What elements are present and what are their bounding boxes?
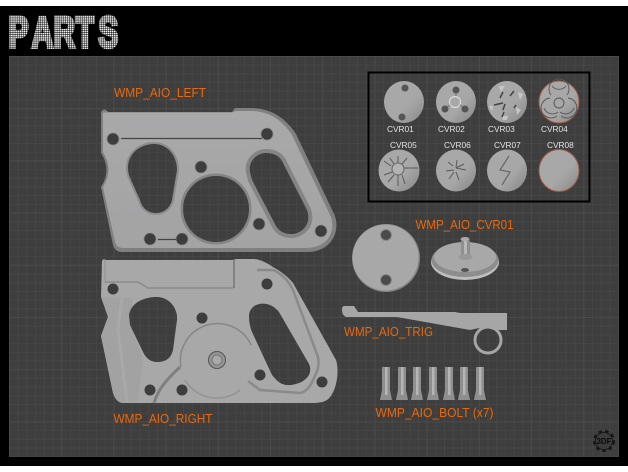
holes bbox=[107, 128, 327, 245]
part: bolts bbox=[380, 367, 486, 400]
label: cover: WMP_AIO_CVR01 bbox=[416, 218, 514, 232]
icon: CVR03 bbox=[487, 81, 527, 123]
callout: cover variants bbox=[368, 72, 590, 202]
title: PARTS bbox=[8, 7, 118, 56]
label: trigger: WMP_AIO_TRIG bbox=[344, 325, 433, 339]
cover labels: CVR01 bbox=[387, 124, 414, 134]
label: right: WMP_AIO_RIGHT bbox=[114, 412, 213, 426]
cover labels bbox=[387, 124, 574, 150]
part: cover side bbox=[431, 237, 499, 280]
icon: CVR02 bbox=[436, 81, 476, 123]
cover labels: CVR05 bbox=[390, 140, 417, 150]
cover labels: CVR06 bbox=[444, 140, 471, 150]
part: trigger bbox=[342, 306, 507, 353]
label: left: WMP_AIO_LEFT bbox=[114, 86, 206, 100]
cover labels: CVR07 bbox=[494, 140, 521, 150]
cover labels: CVR04 bbox=[541, 124, 568, 134]
gear housing bbox=[180, 324, 251, 367]
label: bolts: WMP_AIO_BOLT (x7) bbox=[376, 406, 494, 420]
cover labels: CVR03 bbox=[488, 124, 515, 134]
icon: CVR05 bbox=[378, 150, 420, 192]
icon: CVR07 bbox=[487, 150, 527, 192]
icon: CVR01 bbox=[384, 81, 424, 123]
part: left plate bbox=[101, 108, 336, 252]
grip bbox=[101, 297, 143, 403]
logo: 3DF gear bbox=[594, 432, 614, 450]
icon: CVR08 bbox=[539, 150, 579, 192]
holes bbox=[108, 278, 328, 396]
icon: CVR04 bbox=[539, 79, 579, 123]
part: right plate bbox=[101, 259, 338, 403]
cover labels: CVR02 bbox=[438, 124, 465, 134]
logo: 3DF gear: 3DF bbox=[596, 437, 612, 446]
icon: CVR06 bbox=[436, 150, 476, 192]
part: cover front bbox=[352, 224, 420, 292]
cover labels: CVR08 bbox=[547, 140, 574, 150]
